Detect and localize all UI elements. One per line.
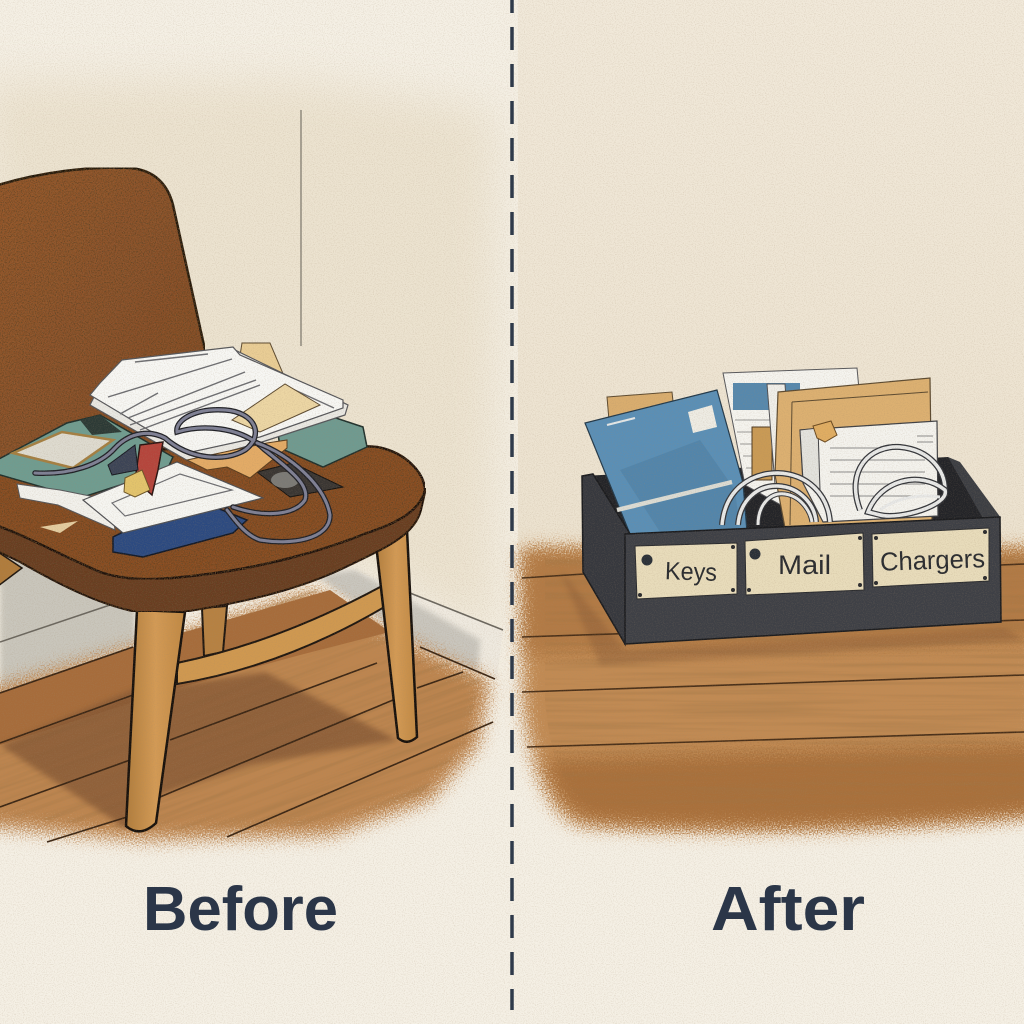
label: mail: [745, 533, 864, 595]
box left side: [582, 474, 630, 644]
left floor wood grain: [0, 590, 480, 829]
heading: after: After: [711, 875, 865, 944]
box shadow on floor: [560, 570, 1024, 665]
blue envelope: [585, 390, 747, 534]
cable loop: [35, 410, 330, 542]
under sheet: [90, 350, 348, 462]
chair back left leg: [202, 606, 227, 656]
left floor: [0, 590, 490, 840]
organizer box: [582, 368, 1001, 644]
green case right: [278, 417, 367, 467]
tan envelope front: [232, 384, 320, 432]
label: chargers: [872, 528, 989, 587]
chair front leg: [126, 610, 185, 831]
box right rim: [948, 457, 1001, 522]
coiled cable right: [856, 447, 945, 516]
coiled cable left: [722, 473, 830, 525]
tan folder back: [607, 392, 676, 432]
keys: [108, 442, 163, 497]
chair stretcher: [177, 586, 386, 684]
white note: [800, 421, 938, 522]
label: keys: [635, 543, 737, 599]
chair: [0, 168, 426, 831]
tan inner folder: [752, 427, 772, 480]
clutter pile: [0, 343, 367, 557]
lower paper stack: [17, 484, 115, 530]
seat edge: [0, 488, 426, 612]
chair right leg: [375, 530, 417, 742]
wall corner line: [300, 110, 302, 346]
baseboard left: [0, 605, 110, 642]
green folder left: [0, 415, 173, 498]
center dashed divider: [510, 0, 514, 1010]
seat top: [0, 445, 425, 579]
right floor: [522, 548, 1024, 832]
label: mail: Mail: [778, 550, 831, 580]
baseboard shadow: [315, 570, 480, 672]
chair back: [0, 168, 205, 500]
paper text lines: [108, 354, 334, 430]
tan folder: [775, 378, 932, 528]
heading: before: Before: [143, 875, 338, 944]
left wall tone: [0, 80, 495, 640]
dark floor shading under the chair: [0, 590, 390, 745]
tablet: [13, 432, 113, 468]
baseboard right: [330, 565, 503, 680]
label: chargers: Chargers: [880, 543, 985, 577]
box interior: [582, 457, 1000, 534]
right floor wood grain: [545, 556, 1024, 758]
tan folder middle: [187, 440, 287, 478]
letter back: [723, 368, 860, 510]
label: keys: Keys: [665, 557, 717, 587]
floor plank lines: [522, 564, 1024, 747]
floor bottom shading: [545, 745, 1024, 826]
floor plank lines: [0, 647, 495, 842]
paper stack: [90, 347, 343, 453]
panel: after scene: [518, 0, 1024, 832]
box front: [625, 517, 1001, 644]
panel: before scene: [0, 74, 508, 862]
dark pad: [257, 463, 343, 497]
shaded wall at lower left: [0, 555, 135, 692]
small rear leg: [0, 552, 22, 586]
small scrap on seat: [40, 521, 78, 533]
tan envelope behind papers: [230, 343, 320, 427]
white paper strip: [767, 384, 792, 485]
front paper: [83, 462, 263, 533]
right wall: [518, 0, 1024, 560]
blue bag: [113, 508, 247, 557]
chair shadow on floor: [0, 672, 397, 828]
floor top shading: [524, 552, 1024, 655]
